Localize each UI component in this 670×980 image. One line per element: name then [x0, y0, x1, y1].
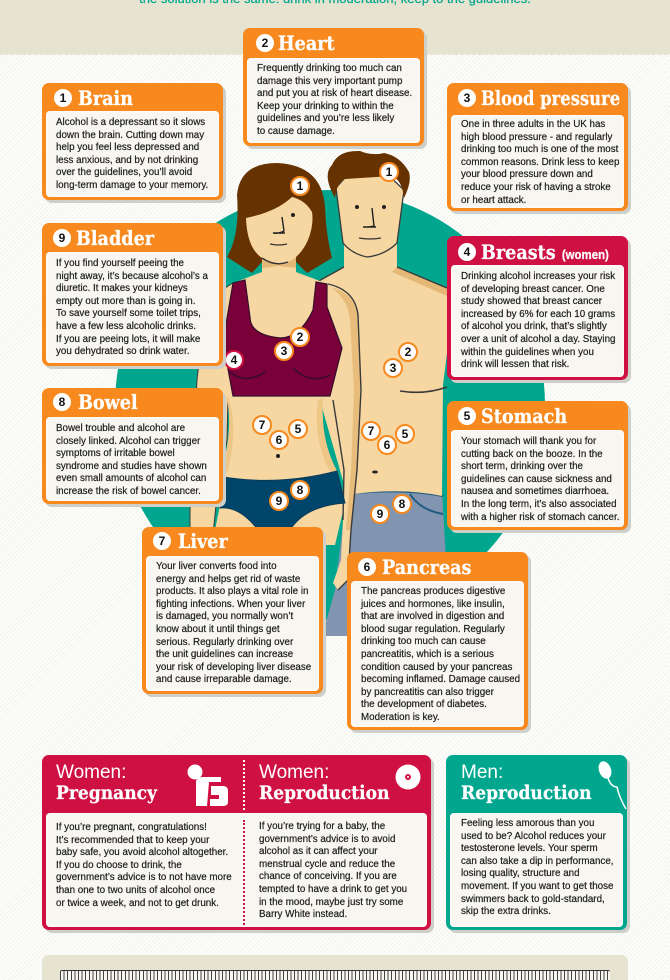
man markers — [362, 163, 417, 523]
panel: stomach: guidelines can cause sickness and — [461, 474, 612, 485]
panel: brain: Alcohol is a depressant so it slows — [56, 117, 205, 128]
woman markers: 7 — [259, 418, 266, 432]
panel: liver: Your liver converts food into — [156, 561, 277, 572]
panel: brain — [42, 83, 223, 200]
panel: pancreas: drinking too much can cause — [361, 636, 486, 647]
panel: bowel: even small amounts of alcohol can — [56, 473, 206, 484]
woman markers: 4 — [231, 353, 238, 367]
panel: bladder: have a few less alcoholic drinks. — [56, 321, 196, 332]
panel: brain: long-term damage to your memory. — [56, 180, 208, 191]
woman markers: 2 — [297, 330, 304, 344]
heading: brain: Brain — [78, 86, 133, 110]
woman markers: 5 — [295, 422, 302, 436]
panel: liver: the unit guidelines can increase — [156, 649, 293, 660]
panel: pancreas: The pancreas produces digestive — [361, 586, 505, 597]
panel: breasts: study showed that breast cancer — [461, 296, 602, 307]
panel: stomach: Your stomach will thank you for — [461, 436, 596, 447]
text: women reproduction: alcohol as it can affect your — [259, 846, 378, 857]
panel: bowel: increase the risk of bowel cancer. — [56, 486, 201, 497]
panel: stomach: 5 — [464, 409, 470, 423]
panel: blood pressure: 3 — [464, 91, 470, 105]
panel: bladder: If you find yourself peeing the — [56, 258, 184, 269]
heading: men reproduction — [461, 762, 592, 804]
man markers: 3 — [390, 361, 397, 375]
panel: men reproduction — [446, 755, 627, 930]
panel: bladder: 9 — [59, 231, 65, 245]
man markers: 7 — [368, 424, 375, 438]
text: pregnancy: If you do choose to drink, the — [56, 860, 182, 871]
teal background circle — [115, 190, 545, 620]
panel: bowel: 8 — [59, 395, 65, 409]
man markers: 6 — [384, 438, 391, 452]
man markers: 9 — [377, 507, 384, 521]
woman markers: 9 — [276, 494, 283, 508]
heading: men reproduction: Reproduction — [461, 782, 592, 804]
panel: liver: know about it until things get — [156, 624, 280, 635]
panel: liver — [142, 527, 323, 694]
panel: pancreas: Moderation is key. — [361, 712, 440, 723]
panel: blood pressure: your blood pressure down and — [461, 169, 593, 180]
panel: pancreas: juices and hormones, like insulin, — [361, 599, 505, 610]
panel: breasts: within the guidelines when you — [461, 347, 594, 358]
panel: men reproduction: can also take a dip in performance, — [461, 856, 613, 867]
panel: men reproduction: skip the extra drinks. — [461, 906, 551, 917]
panel: pancreas: blood sugar regulation. Regularly — [361, 624, 505, 635]
heading: bladder: Bladder — [76, 226, 154, 250]
panel: liver: serious. Regularly drinking over — [156, 637, 293, 648]
text: women reproduction: Barry White instead. — [259, 909, 347, 920]
panel: heart: Keep your drinking to within the — [257, 101, 394, 112]
text: women reproduction: government’s advice is to avoid — [259, 834, 396, 845]
woman markers: 6 — [276, 433, 283, 447]
panel: bladder: diuretic. It makes your kidneys — [56, 283, 188, 294]
panel: liver: products. It also plays a vital role in — [156, 586, 308, 597]
panel: breasts — [447, 236, 628, 380]
panel: blood pressure: common reasons. Drink less to keep — [461, 157, 619, 168]
text: pregnancy: or twice a week, and not to get drunk. — [56, 898, 219, 909]
panel: bowel: Bowel trouble and alcohol are — [56, 423, 185, 434]
ruler — [60, 970, 610, 980]
woman markers: 1 — [297, 179, 304, 193]
panel: bladder: night away, it’s because alcohol’s a — [56, 271, 208, 282]
panel: brain: down the brain. Cutting down may — [56, 130, 204, 141]
panel: brain: less anxious, and by not drinking — [56, 155, 198, 166]
icon: sperm — [598, 761, 627, 810]
man figure — [300, 151, 448, 636]
panel: blood pressure: reduce your risk of having a stroke — [461, 182, 611, 193]
heading: women reproduction: Reproduction — [259, 782, 390, 804]
panel: blood pressure: One in three adults in the UK has — [461, 119, 605, 130]
panel: bowel: symptoms of irritable bowel — [56, 448, 175, 459]
heading: women reproduction: Women: — [259, 762, 329, 783]
panel: bladder: If you are peeing lots, it will make — [56, 334, 200, 345]
heading: blood pressure: Blood pressure — [481, 86, 620, 110]
woman markers: 8 — [297, 483, 304, 497]
panel: men reproduction: Feeling less amorous than you — [461, 818, 594, 829]
text: pregnancy: government’s advice is to not have more — [56, 872, 232, 883]
woman figure — [190, 163, 361, 590]
panel: breasts: 4 — [464, 245, 470, 259]
panel: blood pressure: or heart attack. — [461, 195, 526, 206]
text: women reproduction: If you’re trying for a baby, the — [259, 821, 385, 832]
panel: pancreas: pancreatitis, which is a serious — [361, 649, 494, 660]
bottom band with ruler — [42, 955, 628, 980]
woman markers — [225, 177, 309, 510]
text: pregnancy: It’s recommended that to keep your — [56, 835, 209, 846]
panel: men reproduction: used to be? Alcohol reduces your — [461, 831, 606, 842]
panel: heart: and put you at risk of heart disease. — [257, 88, 412, 99]
panel: pancreas — [347, 552, 528, 730]
panel: stomach: In the long term, it’s also associated — [461, 499, 617, 510]
panel: blood pressure: drinking too much is one of the most — [461, 144, 618, 155]
panel: liver: energy and helps get rid of waste — [156, 574, 300, 585]
text: pregnancy: If you’re pregnant, congratulations! — [56, 822, 207, 833]
panel: heart: Frequently drinking too much can — [257, 63, 402, 74]
heading: men reproduction: Men: — [461, 762, 503, 783]
text: women reproduction: menstrual cycle and reduce the — [259, 859, 395, 870]
panel: pancreas: 6 — [364, 560, 370, 574]
panel: breasts: Drinking alcohol increases your risk — [461, 271, 615, 282]
panel: pancreas: becoming inflamed. Damage caused — [361, 674, 520, 685]
panel: bowel: closely linked. Alcohol can trigger — [56, 436, 200, 447]
panel: blood pressure — [447, 83, 628, 211]
panel: women pregnancy and reproduction — [42, 755, 431, 930]
panel: men reproduction: testosterone levels. Your sperm — [461, 843, 598, 854]
text: pregnancy: than one to two units of alcohol once — [56, 885, 215, 896]
panel: breasts: over a unit of alcohol a day. Staying — [461, 334, 616, 345]
divider dots lower — [243, 820, 245, 925]
panel: breasts: of alcohol you drink, that’s slightly — [461, 321, 607, 332]
panel: pancreas: by pancreatitis can also trigger — [361, 687, 494, 698]
heading: bowel: Bowel — [78, 390, 138, 414]
panel: stomach: with a higher risk of stomach cancer. — [461, 512, 619, 523]
top band — [0, 0, 670, 55]
man markers: 8 — [399, 497, 406, 511]
panel: men reproduction: movement. If you want to get those — [461, 881, 613, 892]
panel: breasts: increased by 6% for each 10 grams — [461, 309, 615, 320]
panel: men reproduction: swimmers back to gold-standard, — [461, 894, 605, 905]
panel: heart: 2 — [262, 36, 268, 50]
panel: liver: your risk of developing liver disease — [156, 662, 311, 673]
man markers: 1 — [386, 165, 393, 179]
panel: stomach — [447, 401, 628, 530]
heading: stomach: Stomach — [481, 404, 567, 428]
text: women reproduction: in the mood, maybe just try some — [259, 897, 403, 908]
heading: breasts: Breasts (women) — [481, 240, 609, 264]
panel: pancreas: condition caused by your pancreas — [361, 662, 512, 673]
heading: pancreas: Pancreas — [382, 555, 471, 579]
heading: women reproduction — [259, 762, 390, 804]
panel: stomach: cutting back on the booze. In the — [461, 449, 603, 460]
heading: liver: Liver — [178, 529, 228, 553]
panel: liver: and cause irreparable damage. — [156, 674, 292, 685]
heading: women pregnancy — [56, 762, 158, 804]
man markers: 5 — [402, 427, 409, 441]
panel: breasts: of developing breast cancer. One — [461, 284, 605, 295]
panel: breasts: drink will lessen that risk. — [461, 359, 569, 370]
panel: liver: is damaged, you normally won’t — [156, 611, 293, 622]
panel: heart: guidelines and you’re less likely — [257, 113, 394, 124]
panel: bowel — [42, 388, 223, 504]
text: women reproduction: tempted to have a drink to get you — [259, 884, 407, 895]
panel: heart — [243, 28, 424, 146]
panel: bladder: empty out more than is going in. — [56, 296, 195, 307]
panel: heart: to cause damage. — [257, 126, 335, 137]
panel: pancreas: the development of diabetes. — [361, 699, 487, 710]
panel: men reproduction: losing quality, structure and — [461, 868, 580, 879]
heading: women pregnancy: Women: — [56, 762, 126, 783]
panel: brain: over the guidelines, you’ll avoid — [56, 167, 192, 178]
panel: brain: 1 — [60, 91, 66, 105]
divider dots — [243, 760, 245, 810]
panel: liver: 7 — [159, 534, 165, 548]
panel: stomach: short term, drinking over the — [461, 461, 583, 472]
heading: heart: Heart — [278, 31, 335, 55]
text: women reproduction — [259, 821, 407, 920]
icon: egg cell — [396, 764, 420, 790]
text: women reproduction: chance of conceiving. If you are — [259, 871, 397, 882]
panel: blood pressure: high blood pressure - and regularly — [461, 132, 612, 143]
panel: stomach: nausea and sometimes diarrhoea. — [461, 486, 609, 497]
panel: heart: damage this very important pump — [257, 76, 402, 87]
text: pregnancy: baby safe, you avoid alcohol altogether. — [56, 847, 228, 858]
panel: bladder — [42, 223, 223, 366]
panel: liver: fighting infections. When your liver — [156, 599, 305, 610]
panel: brain: help you feel less depressed and — [56, 142, 199, 153]
panel: bladder: you dehydrated so drink water. — [56, 346, 189, 357]
panel: pancreas: that are involved in digestion and — [361, 611, 504, 622]
woman markers: 3 — [281, 344, 288, 358]
panel: bladder: To save yourself some toilet trips, — [56, 308, 201, 319]
heading: women pregnancy: Pregnancy — [56, 782, 157, 804]
panel: bowel: syndrome and studies have shown — [56, 461, 207, 472]
icon: pregnancy — [188, 764, 228, 806]
man markers: 2 — [405, 345, 412, 359]
text: pregnancy — [56, 822, 232, 909]
